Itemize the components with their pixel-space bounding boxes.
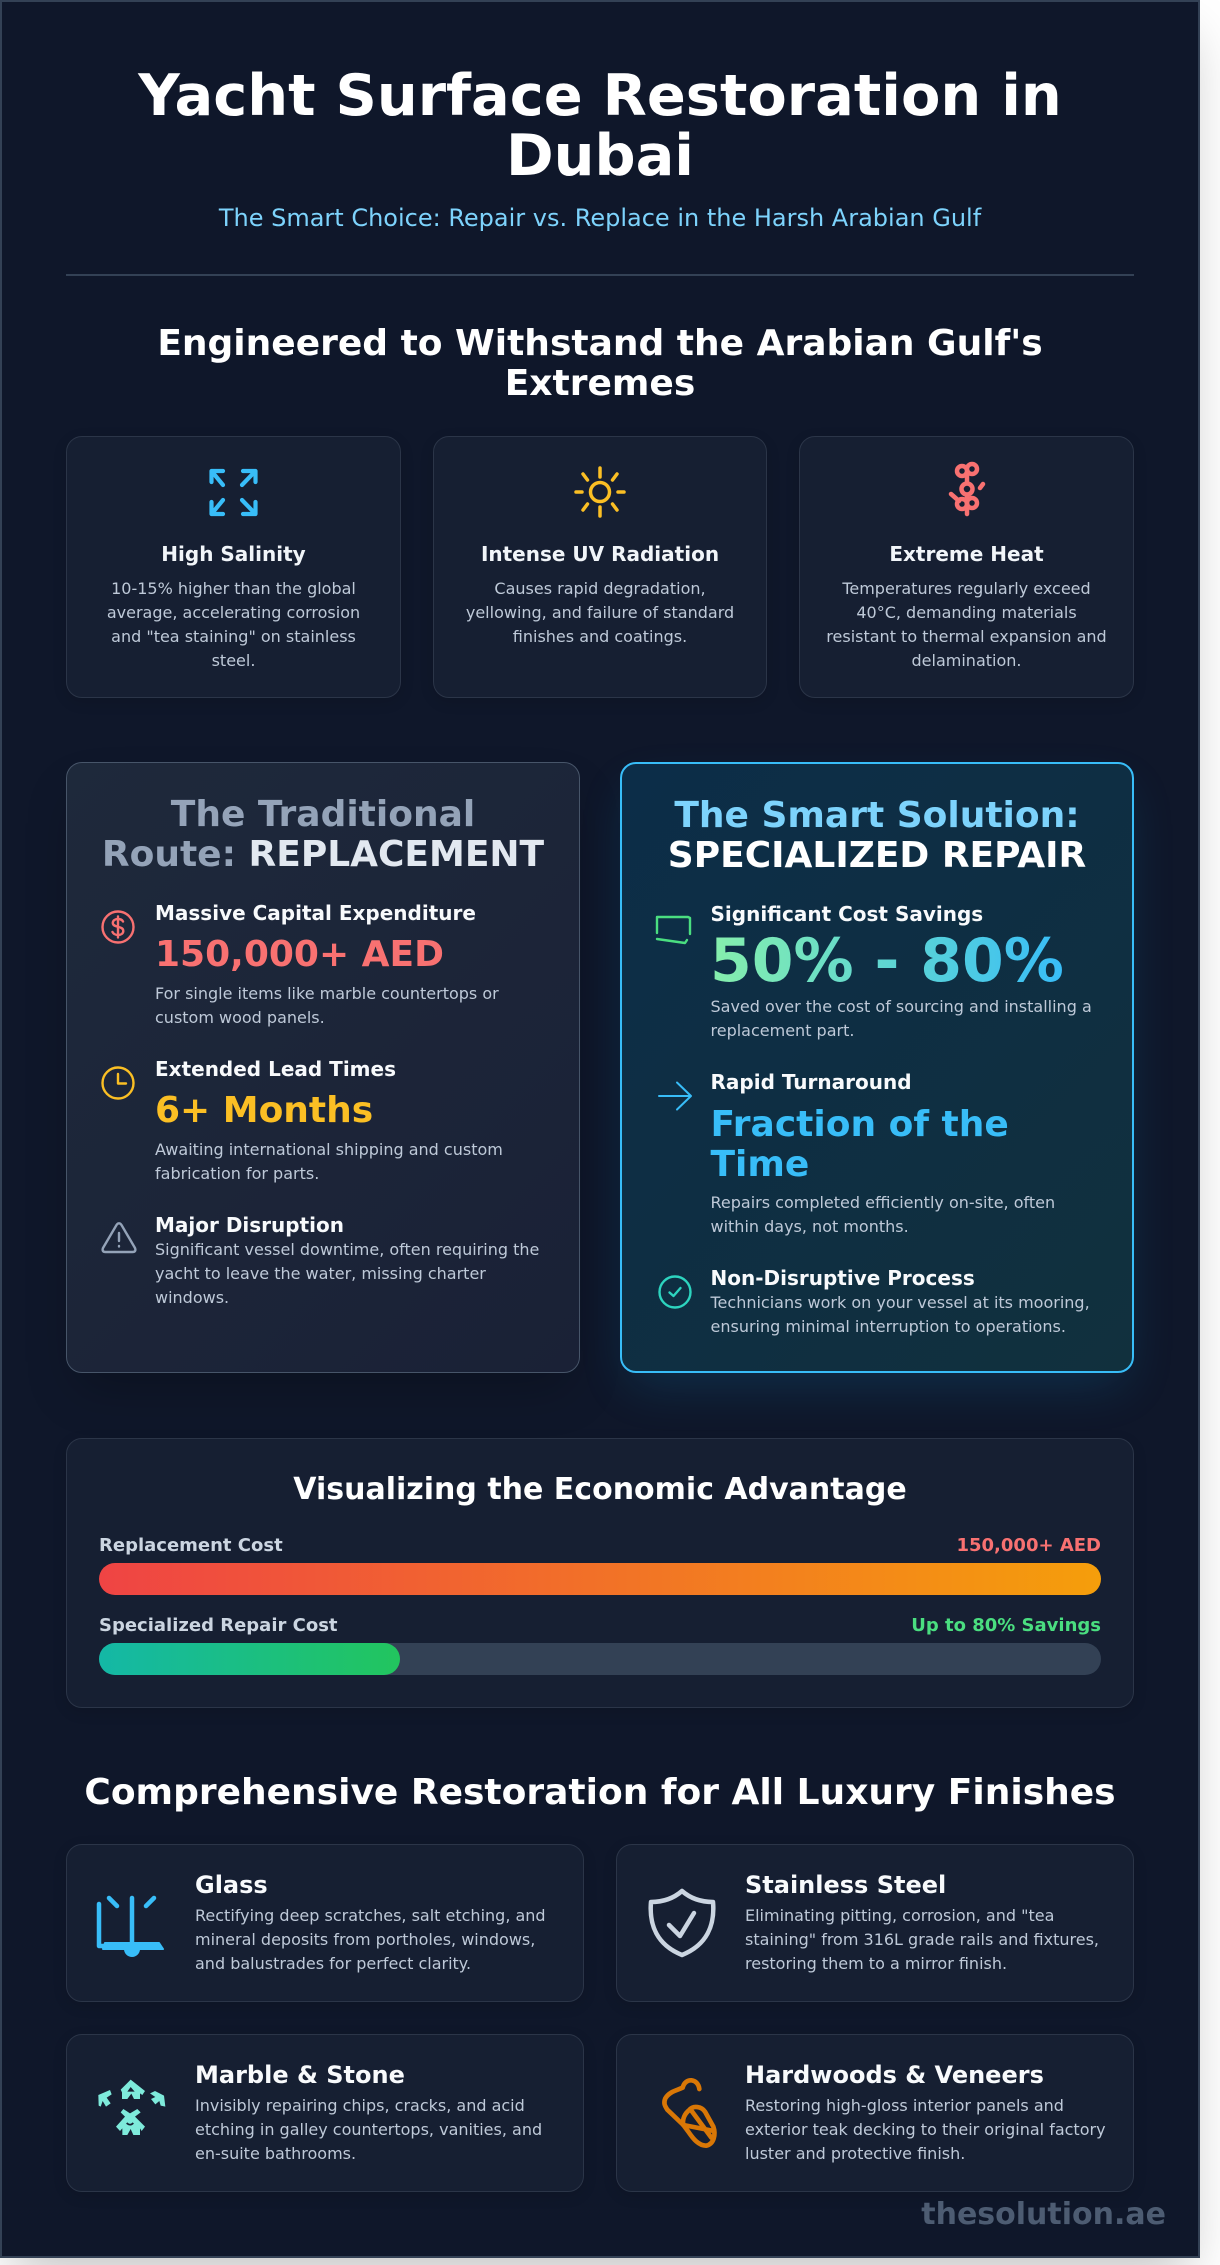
card text: 40°C, demanding materials <box>856 603 1077 622</box>
item text: Technicians work on your vessel at its mooring, <box>710 1293 1090 1312</box>
card text <box>466 579 734 646</box>
finish text: Restoring high-gloss interior panels and <box>745 2096 1064 2115</box>
item: non-disruptive <box>658 1266 1090 1336</box>
item text: windows. <box>155 1288 229 1307</box>
subtitle: The Smart Choice: Repair vs. Replace in the Harsh Arabian Gulf <box>219 204 981 232</box>
item title: Massive Capital Expenditure <box>155 901 476 925</box>
panel: economic advantage chart <box>66 1438 1134 1708</box>
chart heading: Visualizing the Economic Advantage <box>293 1472 907 1507</box>
finish title: Hardwoods & Veneers <box>745 2061 1044 2089</box>
item text: replacement part. <box>710 1021 854 1040</box>
value: savings: Up to 80% Savings <box>911 1615 1101 1636</box>
icon: salinity arrows <box>209 468 258 516</box>
card text: and "tea staining" on stainless <box>111 627 356 646</box>
finish text: luster and protective finish. <box>745 2144 965 2163</box>
item: major disruption <box>101 1213 539 1307</box>
item title: Extended Lead Times <box>155 1057 396 1081</box>
panel: traditional route replacement <box>66 762 580 1373</box>
item text <box>155 1240 539 1307</box>
card text: average, accelerating corrosion <box>107 603 360 622</box>
item title: Non-Disruptive Process <box>710 1266 975 1290</box>
icon: glass <box>96 1896 164 1957</box>
card text: Temperatures regularly exceed <box>842 579 1091 598</box>
item figure <box>710 1104 1009 1185</box>
panel: high salinity <box>66 436 401 698</box>
item: capital expenditure <box>101 901 499 1027</box>
title: Dubai <box>506 122 694 189</box>
finish text: and balustrades for perfect clarity. <box>195 1954 471 1973</box>
card title: Extreme Heat <box>889 542 1044 566</box>
item text: Repairs completed efficiently on-site, often <box>710 1193 1055 1212</box>
item text: within days, not months. <box>710 1217 909 1236</box>
item text <box>155 1140 503 1183</box>
finish title: Glass <box>195 1871 268 1899</box>
finish text: staining" from 316L grade rails and fixtures, <box>745 1930 1099 1949</box>
card text: yellowing, and failure of standard <box>466 603 734 622</box>
finish title: Marble & Stone <box>195 2061 405 2089</box>
finish text: restoring them to a mirror finish. <box>745 1954 1007 1973</box>
card text: resistant to thermal expansion and <box>826 627 1107 646</box>
finish text: mineral deposits from portholes, windows, <box>195 1930 535 1949</box>
card text: 10-15% higher than the global <box>111 579 356 598</box>
finish text: etching in galley countertops, vanities, and <box>195 2120 542 2139</box>
icon: marble <box>98 2080 166 2135</box>
icon: arrow <box>658 1082 692 1110</box>
icon: sun <box>574 466 626 518</box>
item: lead times <box>101 1057 503 1183</box>
heading: gulf extremes: Extremes <box>505 363 695 404</box>
bar fill <box>99 1643 400 1675</box>
finish text <box>195 1906 546 1973</box>
item text <box>710 1193 1055 1236</box>
item text: custom wood panels. <box>155 1008 325 1027</box>
item text: ensuring minimal interruption to operations. <box>710 1317 1066 1336</box>
finish text: Rectifying deep scratches, salt etching, and <box>195 1906 546 1925</box>
heading: gulf extremes <box>157 323 1043 404</box>
icon: heat <box>948 462 986 516</box>
finish title: Stainless Steel <box>745 1871 946 1899</box>
bar: replacement cost <box>99 1563 1101 1595</box>
panel heading: The Smart Solution: <box>674 795 1080 836</box>
label: replacement cost: Replacement Cost <box>99 1535 283 1556</box>
finish text <box>745 1906 1099 1973</box>
finish text: Invisibly repairing chips, cracks, and acid <box>195 2096 525 2115</box>
watermark: thesolution.ae <box>921 2197 1166 2232</box>
panel: hardwoods and veneers <box>616 2034 1134 2192</box>
panel: intense uv <box>433 436 767 698</box>
card title: Intense UV Radiation <box>481 542 719 566</box>
panel heading: SPECIALIZED REPAIR <box>668 835 1086 876</box>
panel: extreme heat <box>799 436 1134 698</box>
finish text: Eliminating pitting, corrosion, and "tea <box>745 1906 1054 1925</box>
title <box>138 62 1062 189</box>
icon: savings <box>656 916 692 944</box>
card text <box>826 579 1107 670</box>
finish text: exterior teak decking to their original factory <box>745 2120 1106 2139</box>
icon: check circle <box>658 1275 692 1309</box>
panel: marble and stone <box>66 2034 584 2192</box>
card text: delamination. <box>912 651 1021 670</box>
item title: Significant Cost Savings <box>710 902 983 926</box>
item text: fabrication for parts. <box>155 1164 319 1183</box>
item text <box>710 1293 1090 1336</box>
panel heading <box>668 795 1086 876</box>
panel heading: The Traditional <box>171 794 475 835</box>
header divider <box>66 274 1134 276</box>
item figure: Time <box>710 1144 809 1185</box>
title: Yacht Surface Restoration in <box>138 62 1062 129</box>
card text: finishes and coatings. <box>513 627 687 646</box>
icon: clock <box>101 1066 135 1100</box>
icon: wood <box>662 2078 717 2148</box>
card text <box>107 579 360 670</box>
item title: Major Disruption <box>155 1213 344 1237</box>
panel: smart solution repair <box>620 762 1134 1373</box>
heading: gulf extremes: Engineered to Withstand the Arabian Gulf's <box>157 323 1043 364</box>
card title: High Salinity <box>161 542 306 566</box>
item: cost savings <box>656 902 1092 1040</box>
icon: shield <box>648 1888 716 1958</box>
item text: yacht to leave the water, missing charter <box>155 1264 486 1283</box>
finish text <box>745 2096 1106 2163</box>
item figure: Fraction of the <box>710 1104 1009 1145</box>
item text: Significant vessel downtime, often requiring the <box>155 1240 539 1259</box>
item figure: savings range: 50% - 80% <box>710 926 1064 996</box>
item figure: 150,000+ AED <box>155 934 444 975</box>
panel heading <box>102 794 544 875</box>
card text: Causes rapid degradation, <box>494 579 706 598</box>
item title: Rapid Turnaround <box>710 1070 912 1094</box>
panel heading: Route: REPLACEMENT <box>102 834 544 875</box>
bar: repair cost <box>99 1643 1101 1675</box>
item text <box>710 997 1092 1040</box>
panel: glass <box>66 1844 584 2002</box>
finish text <box>195 2096 542 2163</box>
card text: steel. <box>212 651 255 670</box>
item text: For single items like marble countertops or <box>155 984 499 1003</box>
panel: stainless steel <box>616 1844 1134 2002</box>
value: replacement cost: 150,000+ AED <box>956 1535 1101 1556</box>
item figure: 6+ Months <box>155 1090 373 1131</box>
item text: Awaiting international shipping and custom <box>155 1140 503 1159</box>
item text: Saved over the cost of sourcing and installing a <box>710 997 1092 1016</box>
icon: dollar <box>101 910 135 944</box>
label: repair cost: Specialized Repair Cost <box>99 1615 338 1636</box>
icon: warning <box>101 1222 137 1254</box>
item: rapid turnaround <box>658 1070 1055 1236</box>
finish text: en-suite bathrooms. <box>195 2144 356 2163</box>
heading: luxury finishes: Comprehensive Restoration for All Luxury Finishes <box>84 1772 1116 1813</box>
item text <box>155 984 499 1027</box>
